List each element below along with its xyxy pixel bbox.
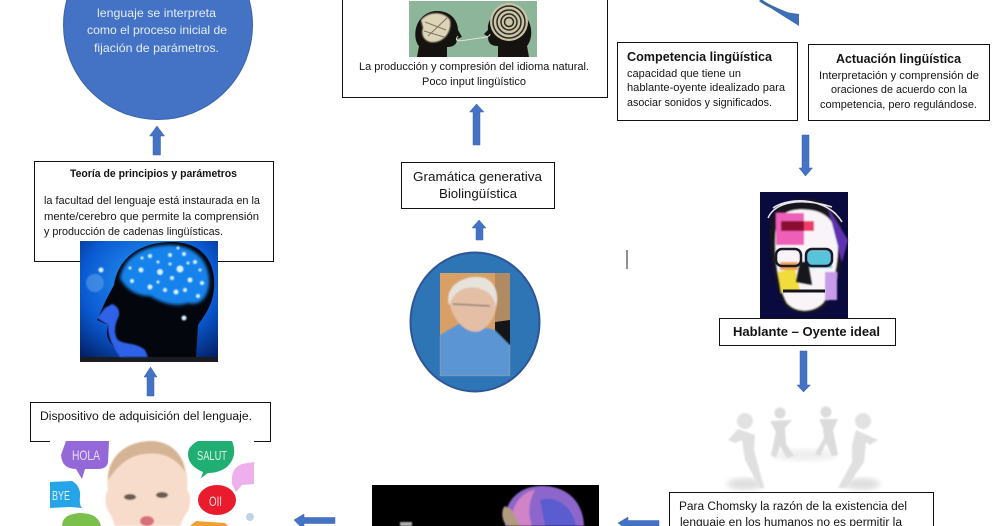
icon: HOLA bubble (61, 441, 109, 479)
panel: ideal speaker-hearer (720, 318, 896, 346)
image: pop art Chomsky portrait (760, 192, 848, 318)
panel: linguistic performance: Actuación lingüística (836, 51, 962, 66)
panel: theory of principles and parameters: mente/cerebro que permite la comprensión (44, 211, 259, 223)
panel: theory of principles and parameters (34, 162, 274, 262)
panel: linguistic performance: competencia, pero regulándose. (820, 99, 977, 111)
arrow: up to production box (470, 104, 484, 145)
icon: green bubble (62, 513, 101, 526)
icon: SALUT bubble (188, 441, 234, 478)
panel: reason for language (670, 492, 934, 526)
icon: BYE bubble (50, 481, 82, 508)
arrow: up to circle (150, 126, 164, 155)
panel: theory of principles and parameters: la facultad del lenguaje está instaurada en la (44, 195, 261, 207)
icon: OII bubble: OII (209, 493, 222, 509)
panel: fixing parameters circle (64, 0, 252, 120)
image: baby with speech bubbles (50, 441, 254, 526)
panel: fixing parameters circle: fijación de parámetros. (94, 41, 219, 55)
panel: fixing parameters circle: lenguaje se interpreta (97, 6, 216, 20)
panel: ideal speaker-hearer: Hablante – Oyente ideal (733, 324, 880, 339)
panel: linguistic competence: capacidad que tiene un (627, 68, 741, 80)
panel: generative grammar (402, 162, 554, 208)
panel: linguistic performance: oraciones de acuerdo con la (831, 84, 968, 96)
panel: theory of principles and parameters: Teoría de principios y parámetros (70, 168, 237, 180)
icon: SALUT bubble: SALUT (197, 448, 227, 463)
arrow: curved arrow into competence (760, 0, 799, 26)
arrow: left to baby (294, 514, 335, 526)
panel: linguistic competence (618, 42, 798, 120)
image: Chomsky photo (440, 273, 510, 376)
icon: orange bubble (190, 521, 228, 526)
arrow: up to theory box (144, 367, 157, 396)
arrow: down to figures (797, 351, 810, 392)
panel: linguistic competence: hablante-oyente idealizado para (627, 82, 786, 94)
icon: OII bubble (198, 485, 236, 515)
panel: linguistic competence: Competencia lingüística (627, 49, 773, 64)
arrow: down to pop art portrait (799, 135, 812, 176)
panel: linguistic competence: asociar sonidos y significados. (627, 97, 772, 109)
icon: baby face (106, 441, 190, 526)
panel: theory of principles and parameters: y producción de cadenas lingüísticas. (44, 226, 223, 238)
icon: pink bubble (232, 462, 254, 492)
arrow: left to dark brain image (618, 517, 659, 526)
panel: language acquisition device (30, 402, 270, 442)
panel: Chomsky portrait circle (410, 252, 540, 392)
panel: linguistic performance: Interpretación y comprensión de (819, 70, 979, 82)
image: colored brain on black background (372, 485, 599, 526)
panel: linguistic performance (808, 44, 990, 120)
panel: production and comprehension (342, 0, 608, 98)
image: four white 3D figures (727, 406, 880, 490)
panel: generative grammar: Gramática generativa (413, 169, 543, 184)
icon: HOLA bubble: HOLA (72, 447, 100, 463)
image: glowing brain in head (80, 241, 218, 362)
panel: language acquisition device: Dispositivo de adquisición del lenguaje. (40, 411, 252, 423)
image: two heads with scribble and spiral (409, 1, 537, 57)
panel: fixing parameters circle: como el proceso inicial de (87, 23, 227, 37)
panel: reason for language: Para Chomsky la razón de la existencia del (679, 501, 907, 513)
arrow: up to grammar box (472, 220, 486, 240)
panel: production and comprehension: Poco input lingüístico (422, 76, 526, 88)
cursor mark (626, 250, 628, 269)
panel: production and comprehension: La producción y compresión del idioma natural. (359, 61, 589, 73)
panel: generative grammar: Biolingüística (439, 186, 518, 201)
icon: BYE bubble: BYE (52, 488, 70, 503)
